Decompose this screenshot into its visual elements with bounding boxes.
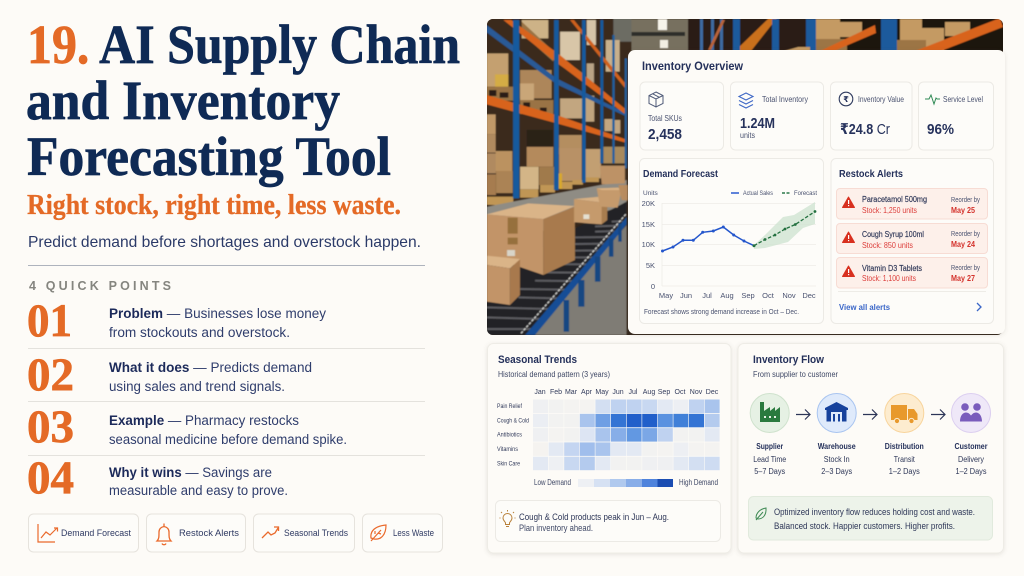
chip: less waste (362, 514, 442, 552)
panel: restock alerts (831, 158, 994, 324)
panel: demand forecast (640, 158, 824, 324)
line chart: Dec (802, 291, 816, 300)
pallets lower (487, 177, 599, 205)
heatmap: Pain Relief (497, 403, 522, 410)
icon: warning (842, 197, 854, 208)
icon: line chart (38, 524, 58, 542)
ceiling and background of top strip (628, 19, 688, 51)
step: distribution: 1–2 Days (889, 467, 920, 476)
step: supplier: Lead Time (753, 455, 786, 464)
step: distribution: Distribution (885, 442, 924, 451)
title: Forecasting Tool (27, 126, 391, 187)
KPI card: total SKUs: 2,458 (648, 126, 682, 143)
title (26, 14, 460, 187)
KPI card: total inventory: 1.24M (740, 115, 775, 132)
line chart: 10K (642, 240, 655, 249)
alert: vitamin D3: Stock: 1,100 units (862, 274, 916, 283)
heatmap: Antibiotics (497, 432, 523, 438)
KPI card: total SKUs: Total SKUs (648, 114, 682, 123)
icon: warehouse (825, 402, 848, 422)
section heading: 4 quick points: 4 QUICK POINTS (29, 279, 171, 293)
chip: seasonal trends (254, 514, 354, 552)
icon: rupee coin: ₹ (843, 95, 849, 104)
conveyor (487, 202, 627, 335)
heatmap legend: High Demand (679, 478, 718, 487)
step: supplier (750, 394, 789, 476)
point 03: example: Example — Pharmacy restocks (109, 413, 299, 428)
photo left part in zoom coordinates (485, 15, 632, 335)
KPI card: service level (918, 82, 994, 150)
chip: less waste: Less Waste (393, 528, 434, 538)
icon: box (649, 92, 663, 108)
point 01: problem: from stockouts and overstock. (109, 325, 290, 340)
mid boxes (576, 196, 600, 202)
heatmap legend: Low Demand (534, 478, 571, 487)
step: distribution (885, 394, 924, 476)
alert: paracetamol: Stock: 1,250 units (862, 206, 917, 215)
step: warehouse: Stock In (824, 455, 850, 464)
heatmap: Apr (581, 389, 593, 396)
title: 19. AI Supply Chain (27, 14, 460, 75)
point 01: problem: 01 (27, 295, 72, 347)
alert: paracetamol: Paracetamol 500mg (862, 195, 927, 204)
heatmap (497, 389, 720, 470)
top shelf boxes (522, 20, 548, 38)
KPI card: service level: 96% (927, 121, 954, 138)
callout: seasonal tip (496, 500, 720, 542)
point 02: what it does: 02 (27, 349, 74, 401)
KPI card: total inventory (730, 82, 824, 150)
chip: demand forecast (28, 514, 138, 552)
heading: restock alerts: Restock Alerts (839, 168, 903, 180)
tagline: Predict demand before shortages and overstock happen. (28, 234, 421, 251)
heatmap: Aug (643, 389, 655, 396)
line chart (642, 190, 817, 300)
line chart: Oct (762, 291, 775, 300)
heading: inventory overview: Inventory Overview (642, 59, 744, 73)
line chart: 20K (642, 199, 655, 208)
line chart: Aug (720, 291, 734, 300)
floor (487, 179, 628, 219)
step: distribution: Transit (894, 455, 916, 464)
arrow (863, 410, 877, 420)
small box (487, 256, 520, 268)
chip: seasonal trends: Seasonal Trends (284, 528, 348, 538)
point 02: what it does (27, 349, 312, 401)
heatmap: Cough & Cold (497, 418, 529, 424)
alert: vitamin D3: Vitamin D3 Tablets (862, 264, 922, 273)
panel: inventory overview (628, 50, 1005, 334)
heatmap: Mar (565, 389, 578, 396)
point 02: what it does: using sales and trend signals. (109, 379, 285, 394)
panel: inventory flow (738, 344, 1004, 553)
step: customer (952, 394, 990, 476)
alert: vitamin D3 (836, 258, 988, 288)
chip: demand forecast: Demand Forecast (61, 528, 131, 538)
icon: factory (760, 402, 780, 422)
icon: warning (842, 232, 854, 242)
heatmap: Feb (550, 389, 562, 396)
callout: optimized flow: Balanced stock. Happier customers. Higher profits. (774, 521, 955, 531)
point 04: why it wins: Why it wins — Savings are (109, 465, 272, 480)
callout: optimized flow: Optimized inventory flow reduces holding cost and waste. (774, 507, 975, 517)
icon: leaf (371, 525, 386, 541)
step: customer: Delivery (958, 455, 984, 464)
subtitle: Right stock, right time, less waste. (27, 190, 401, 221)
icon: light bulb (500, 510, 516, 526)
step: customer: Customer (954, 442, 988, 451)
heatmap: Jul (629, 389, 638, 396)
callout: seasonal tip: Plan inventory ahead. (519, 523, 593, 534)
alert: vitamin D3: May 27 (951, 274, 975, 283)
heatmap: Dec (706, 389, 719, 396)
alert: cough syrup: Reorder by (951, 231, 980, 238)
row: antibiotics (533, 428, 720, 442)
chart legend (731, 190, 817, 197)
alert: cough syrup: May 24 (951, 240, 975, 249)
heading: demand forecast: Demand Forecast (643, 168, 718, 180)
alert: vitamin D3: Reorder by (951, 265, 980, 272)
actual sales line (661, 226, 754, 252)
KPI card: total SKUs (640, 82, 724, 150)
KPI card: total inventory: units (740, 131, 755, 140)
chart legend: Actual Sales (743, 190, 774, 197)
chart note: Forecast shows strong demand increase in Oct – Dec. (644, 307, 799, 316)
step: warehouse: 2–3 Days (821, 467, 852, 476)
point 04: why it wins: measurable and easy to prove. (109, 483, 288, 498)
pallets top (487, 22, 584, 114)
heatmap: Sep (658, 389, 670, 396)
line chart: 15K (642, 220, 655, 229)
warehouse photo (485, 15, 1004, 335)
line chart: Nov (782, 291, 796, 300)
line chart: Jun (680, 291, 692, 300)
line chart: 5K (646, 261, 655, 270)
subheading: From supplier to customer (753, 370, 838, 379)
step: supplier: Supplier (756, 442, 783, 451)
heatmap legend (534, 478, 718, 487)
icon: trend line (262, 527, 278, 538)
step: warehouse: Warehouse (818, 442, 856, 451)
alert: cough syrup (836, 224, 988, 254)
lower boxes (487, 114, 496, 134)
row: skin care (533, 457, 720, 470)
row: pain relief (533, 400, 720, 413)
alert: paracetamol: May 25 (951, 206, 975, 215)
point 04: why it wins: 04 (27, 452, 74, 504)
point 04: why it wins (27, 452, 288, 504)
big box (487, 203, 575, 219)
line chart: Units (643, 190, 659, 197)
icon: bell (157, 524, 171, 545)
forecast confidence band (754, 202, 815, 249)
heading: inventory flow: Inventory Flow (753, 354, 824, 366)
arrow (931, 410, 945, 420)
line chart: 0 (651, 282, 655, 291)
forecast line (752, 210, 816, 247)
arrow (796, 410, 810, 420)
KPI card: total inventory: Total Inventory (762, 95, 808, 104)
alert: cough syrup: Cough Syrup 100ml (862, 230, 924, 239)
link: view all alerts (839, 302, 981, 312)
alert: paracetamol (836, 188, 988, 219)
point 02: what it does: What it does — Predicts demand (109, 360, 312, 375)
point 01: problem (27, 295, 326, 347)
icon: truck (891, 405, 918, 420)
chip: restock alerts (146, 514, 246, 552)
heatmap: Jun (612, 389, 624, 396)
icon: people (960, 403, 982, 422)
subheading: Historical demand pattern (3 years) (498, 370, 610, 379)
step: warehouse (817, 394, 856, 476)
icon: warning (842, 266, 854, 276)
heatmap: Jan (534, 389, 546, 396)
KPI card: inventory value (830, 82, 912, 150)
chart legend: Forecast (794, 190, 817, 197)
line chart: Sep (741, 291, 755, 300)
heading: seasonal trends: Seasonal Trends (498, 354, 577, 366)
alert: paracetamol: Reorder by (951, 197, 980, 204)
heatmap: Vitamins (497, 446, 519, 453)
icon: layers (739, 93, 753, 108)
uprights blue (513, 20, 519, 198)
heatmap: May (595, 389, 609, 396)
icon: leaf (756, 508, 766, 520)
callout: seasonal tip: Cough & Cold products peak in Jun – Aug. (519, 512, 669, 523)
link: view all alerts: View all alerts (839, 302, 890, 312)
title: and Inventory (26, 70, 340, 131)
KPI card: service level: Service Level (943, 95, 983, 104)
KPI card: inventory value: Inventory Value (858, 95, 904, 104)
heatmap: Skin Care (497, 460, 520, 468)
line chart: May (659, 291, 673, 300)
point 03: example: seasonal medicine before demand spike. (109, 432, 347, 447)
row: cough and cold (533, 414, 720, 427)
step: supplier: 5–7 Days (754, 467, 785, 476)
icon: pulse (925, 95, 940, 104)
point 03: example: 03 (27, 401, 74, 453)
heatmap: Oct (675, 389, 685, 396)
callout: optimized flow (748, 496, 992, 540)
beams (487, 25, 627, 117)
point 03: example (27, 401, 347, 453)
panel: seasonal trends (488, 344, 731, 553)
alert: cough syrup: Stock: 850 units (862, 241, 913, 250)
heatmap: Nov (690, 389, 703, 396)
KPI card: inventory value: ₹24.8 Cr (840, 121, 890, 138)
line chart: Jul (702, 291, 712, 300)
chip: restock alerts: Restock Alerts (179, 528, 240, 538)
row: vitamins (533, 442, 720, 456)
step: customer: 1–2 Days (956, 467, 987, 476)
point 01: problem: Problem — Businesses lose money (109, 306, 326, 321)
